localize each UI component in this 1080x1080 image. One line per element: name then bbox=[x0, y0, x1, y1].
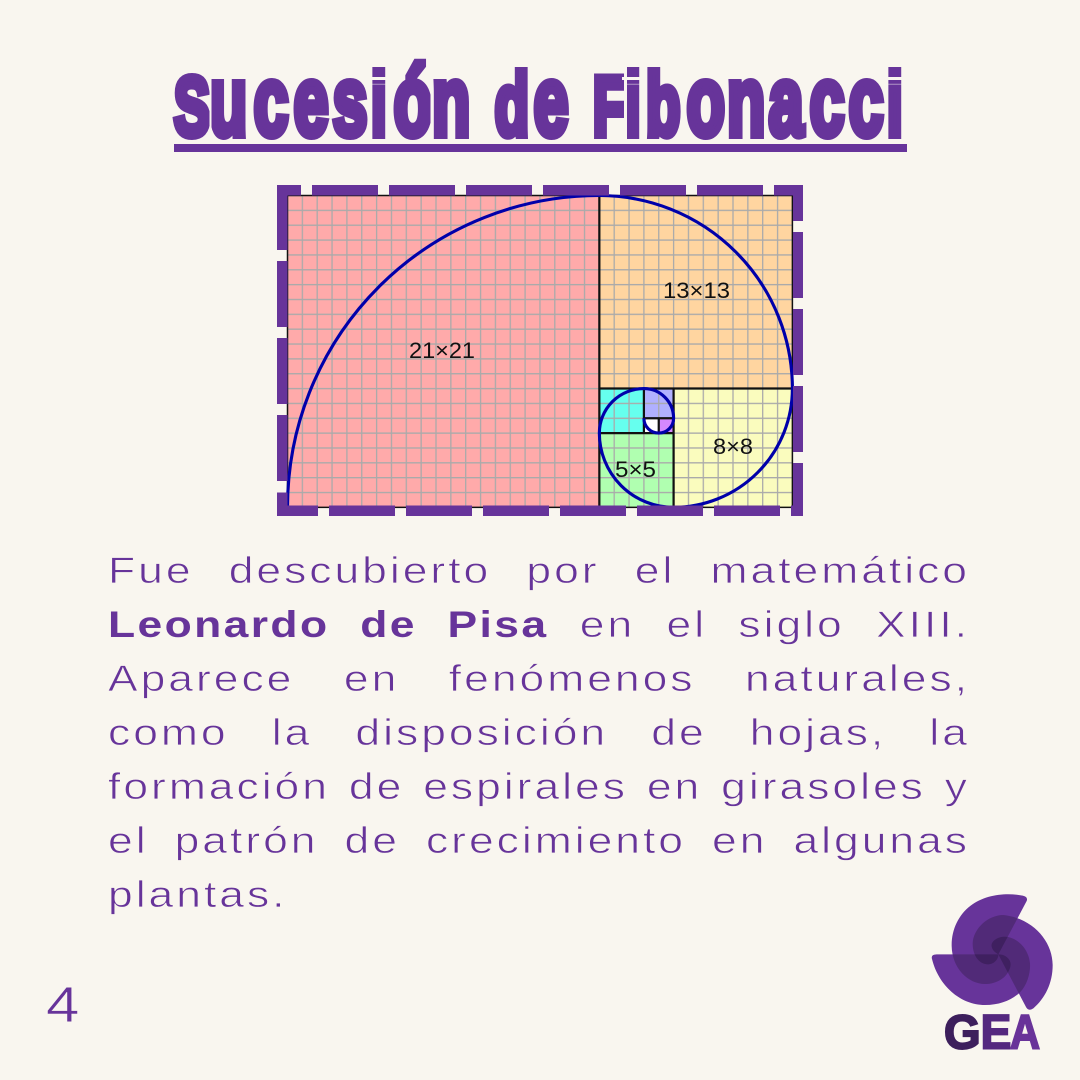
square labels: 13×13 bbox=[663, 278, 730, 303]
title: s bbox=[333, 48, 367, 156]
logo wordmark: G bbox=[944, 1005, 981, 1059]
body text: Aparece en fenómenos naturales, bbox=[108, 658, 970, 699]
body text: plantas. bbox=[108, 874, 288, 915]
title: c bbox=[810, 48, 844, 156]
title: e bbox=[294, 48, 329, 156]
logo wordmark: A bbox=[1010, 1005, 1040, 1059]
square labels: 21×21 bbox=[409, 338, 475, 363]
logo wordmark bbox=[944, 1005, 1040, 1059]
body text: Fue descubierto por el matemático bbox=[108, 550, 970, 591]
logo spiral blades bbox=[932, 894, 1053, 1010]
title: b bbox=[646, 55, 680, 154]
GEA logo bbox=[932, 894, 1053, 1059]
body text bbox=[108, 550, 970, 915]
title: o bbox=[687, 48, 725, 156]
title: u bbox=[209, 48, 247, 156]
body text: Leonardo de Pisa en el siglo XIII. bbox=[108, 604, 970, 645]
logo wordmark: E bbox=[981, 1005, 1011, 1059]
title: F bbox=[593, 59, 626, 153]
title: i bbox=[371, 55, 387, 154]
coloured squares bbox=[288, 196, 792, 507]
square labels: 8×8 bbox=[713, 434, 753, 459]
title: i bbox=[625, 55, 641, 154]
body text: como la disposición de hojas, la bbox=[108, 712, 970, 753]
title: i bbox=[887, 55, 903, 154]
square labels: 5×5 bbox=[615, 457, 656, 482]
fibonacci spiral diagram bbox=[277, 185, 803, 516]
body text: formación de espirales en girasoles y bbox=[108, 766, 970, 807]
title: ó bbox=[394, 48, 432, 156]
title: a bbox=[769, 48, 804, 156]
title: S bbox=[174, 59, 210, 153]
title: e bbox=[534, 48, 569, 156]
title: d bbox=[495, 55, 529, 154]
dashed purple frame bbox=[277, 185, 803, 516]
square labels bbox=[409, 278, 753, 482]
title: n bbox=[432, 48, 470, 156]
square outlines bbox=[288, 196, 792, 507]
title: n bbox=[727, 48, 765, 156]
spiral curve bbox=[288, 196, 792, 507]
title: c bbox=[849, 48, 884, 156]
title bbox=[172, 48, 907, 156]
title: c bbox=[254, 48, 289, 156]
body text: el patrón de crecimiento en algunas bbox=[108, 820, 970, 861]
page number: 4 bbox=[46, 977, 79, 1033]
